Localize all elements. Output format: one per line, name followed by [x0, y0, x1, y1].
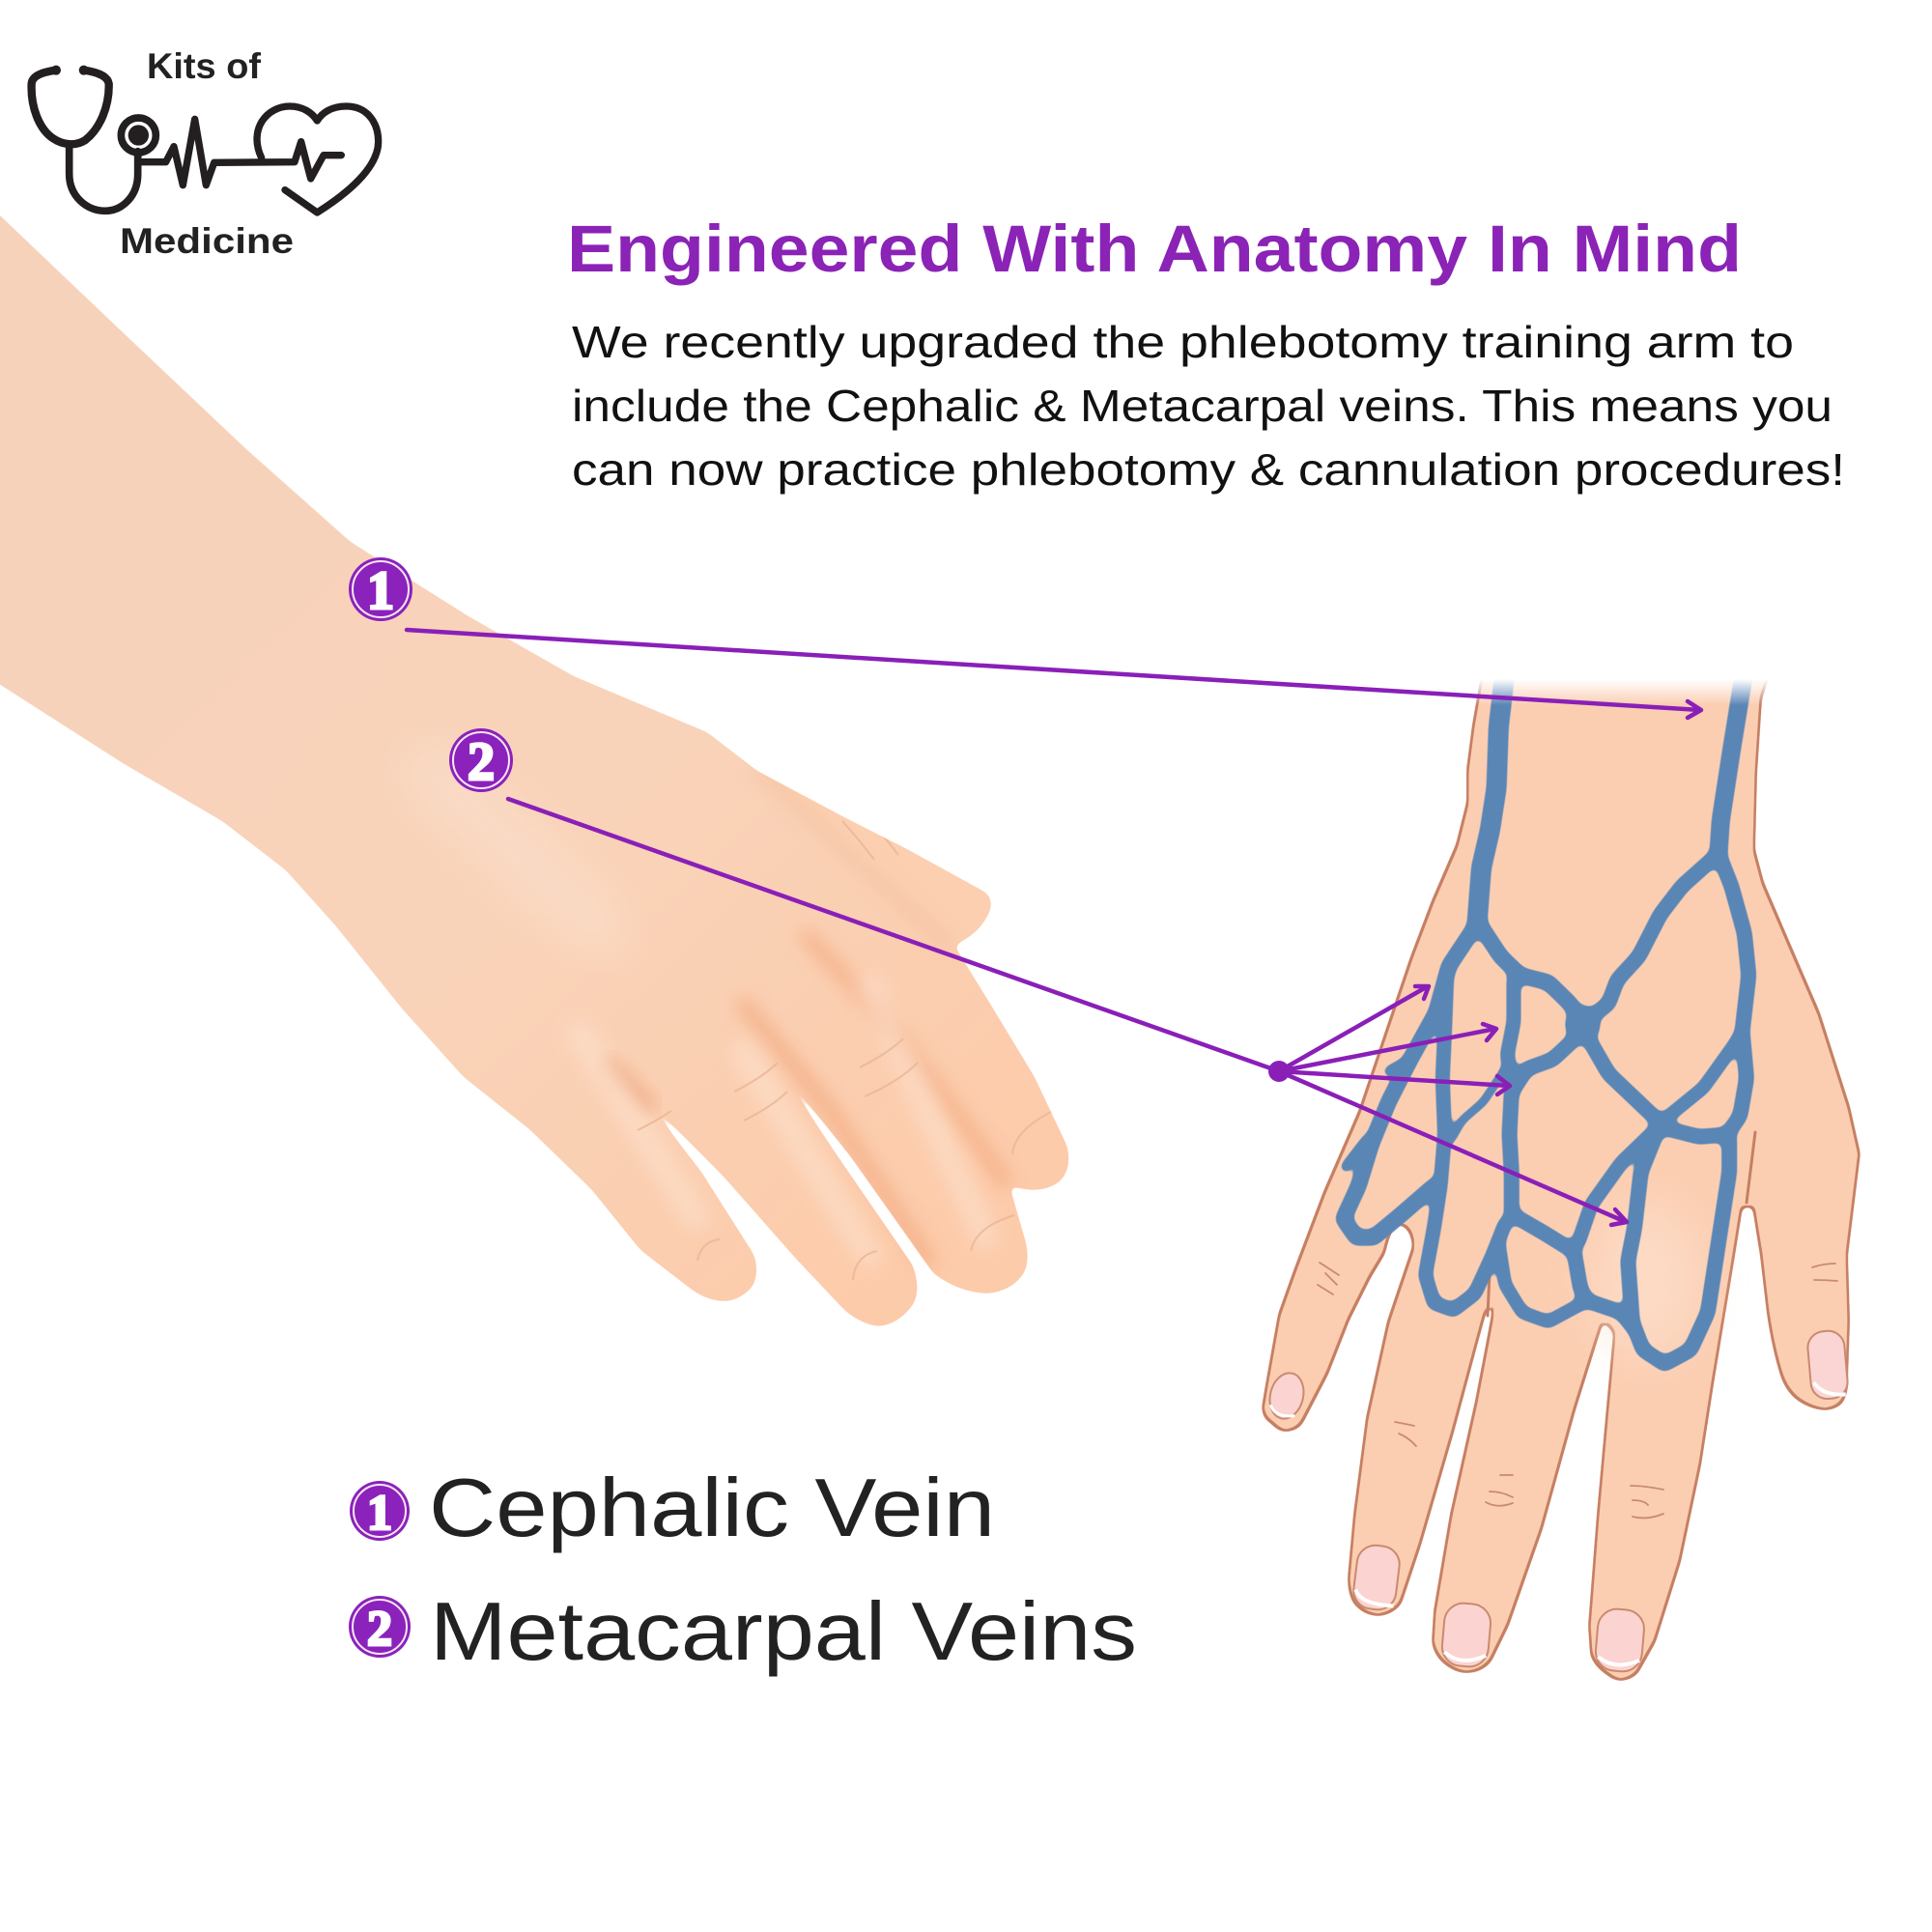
veins network: [1344, 671, 1748, 1364]
legend: cephalic vein: 1: [367, 1486, 392, 1541]
nail: thumb: [1806, 1329, 1849, 1400]
logo icon: stethoscope, pulse and heart: [32, 66, 379, 213]
legend: cephalic vein: Cephalic Vein: [429, 1463, 995, 1554]
description text: We recently upgraded the phlebotomy training arm to: [572, 317, 1794, 367]
legend: metacarpal veins: 2: [367, 1602, 392, 1657]
description text: [572, 317, 1845, 495]
illustration: hand with veins: [1262, 647, 1861, 1681]
badge 2 on hand: [449, 728, 513, 792]
finger creases: [1318, 1263, 1837, 1518]
wrist fade: [1449, 647, 1787, 705]
cephalic vein right trunk: [1719, 671, 1745, 854]
pointer: cephalic vein arrow: [407, 630, 1701, 718]
far finger behind the hand: [757, 771, 1005, 956]
title: Engineered With Anatomy In Mind: [567, 212, 1742, 286]
pointer: metacarpal vein arrows: [508, 799, 1627, 1225]
finger nails and creases: [638, 821, 1053, 1280]
cephalic vein left trunk: [1477, 671, 1505, 923]
legend: metacarpal veins: Metacarpal Veins: [430, 1586, 1137, 1678]
logo wordmark bottom: Medicine: [120, 221, 294, 261]
metacarpal veins: [1344, 923, 1477, 1237]
hand outline: [1262, 675, 1861, 1681]
nail: middle finger: [1440, 1602, 1492, 1668]
arm silhouette: [0, 215, 1068, 1326]
hand highlight: [1594, 1203, 1700, 1357]
nail: index finger: [1594, 1607, 1646, 1673]
finger shading: [435, 771, 1005, 1261]
badge 2 on hand: 2: [468, 732, 495, 792]
badge 1 on arm: [349, 557, 412, 621]
vein hub: [1566, 1006, 1600, 1043]
webbing creases: [1488, 1132, 1755, 1316]
logo wordmark top: Kits of: [147, 46, 262, 86]
photo: training arm and hand: [0, 215, 1068, 1326]
nail: pinky: [1265, 1370, 1308, 1422]
nail: ring finger: [1351, 1544, 1402, 1611]
badge 1 on arm: 1: [367, 561, 394, 621]
description text: can now practice phlebotomy & cannulation procedures!: [572, 444, 1845, 495]
description text: include the Cephalic & Metacarpal veins. This means you: [572, 381, 1833, 431]
logo: Kits of Medicine: [32, 46, 379, 261]
